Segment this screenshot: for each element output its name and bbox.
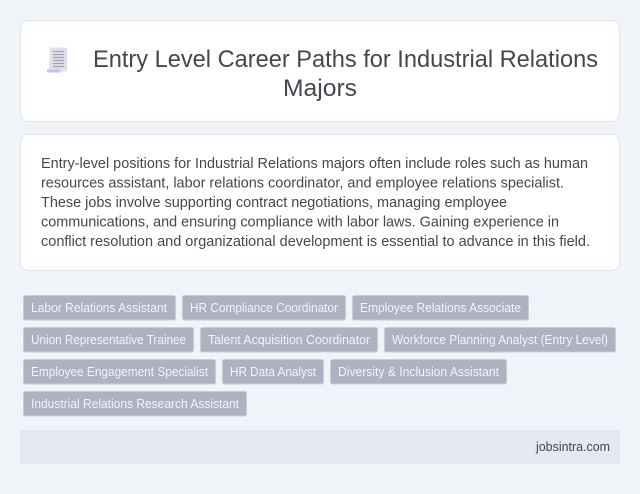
description text: resources assistant, labor relations coordinator, and employee relations specialist. (41, 176, 564, 192)
tag: HR Compliance Coordinator (182, 296, 346, 320)
tag: Industrial Relations Research Assistant (24, 392, 246, 416)
title (93, 46, 598, 102)
tag: Talent Acquisition Coordinator: Talent Acquisition Coordinator (208, 333, 370, 347)
tag: Labor Relations Assistant (24, 296, 176, 320)
description text: Entry-level positions for Industrial Relations majors often include roles such as human (41, 156, 588, 172)
tag: Union Representative Trainee: Union Representative Trainee (31, 333, 186, 347)
icon: document scroll (47, 47, 67, 72)
panel: header (20, 20, 620, 122)
tag: HR Data Analyst (222, 360, 324, 384)
tag: Employee Engagement Specialist (24, 360, 216, 384)
tag: Employee Relations Associate (352, 296, 528, 320)
panel: description (20, 134, 620, 270)
title: Majors (283, 75, 357, 102)
tag: HR Compliance Coordinator: HR Compliance Coordinator (190, 301, 338, 315)
tag: Workforce Planning Analyst (Entry Level) (384, 328, 616, 352)
description text (41, 156, 590, 250)
tag: HR Data Analyst: HR Data Analyst (230, 365, 316, 379)
tag: Industrial Relations Research Assistant: Industrial Relations Research Assistant (31, 397, 239, 411)
tag: Labor Relations Assistant: Labor Relations Assistant (31, 301, 167, 315)
description text: conflict resolution and organizational development is essential to advance in this field. (41, 234, 590, 250)
tag: Employee Engagement Specialist: Employee Engagement Specialist (31, 365, 208, 379)
tag: Employee Relations Associate: Employee Relations Associate (360, 301, 521, 315)
description text: communications, and ensuring compliance with labor laws. Gaining experience in (41, 214, 559, 230)
footer source text: jobsintra.com (535, 440, 610, 454)
tag: Talent Acquisition Coordinator (200, 328, 378, 352)
title: Entry Level Career Paths for Industrial Relations (93, 46, 598, 73)
footer (20, 430, 620, 464)
tag: Union Representative Trainee (24, 328, 194, 352)
tag: Workforce Planning Analyst (Entry Level): Workforce Planning Analyst (Entry Level) (392, 333, 608, 347)
tags: career paths (24, 296, 616, 416)
description text: These jobs involve supporting contract negotiations, managing employee (41, 195, 507, 211)
tag: Diversity & Inclusion Assistant (330, 360, 506, 384)
tag: Diversity & Inclusion Assistant: Diversity & Inclusion Assistant (338, 365, 499, 379)
